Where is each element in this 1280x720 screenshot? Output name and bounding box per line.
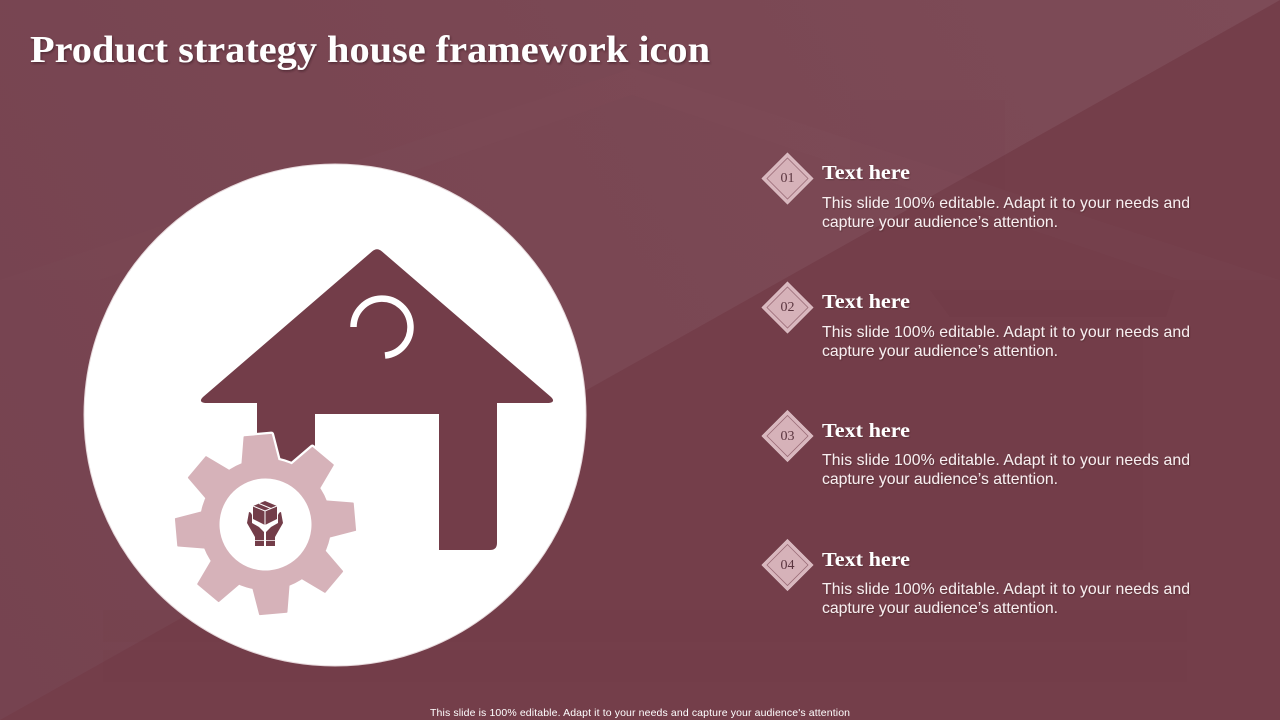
body 2: This slide 100% editable. Adapt it to your needs and [822, 324, 1190, 341]
badge 03 [762, 410, 813, 462]
badge 01 [762, 153, 813, 204]
icon: gear [169, 428, 362, 621]
item 3 [762, 410, 1190, 488]
footer note: This slide is 100% editable. Adapt it to your needs and capture your audience's attention [430, 707, 850, 719]
body 3: This slide 100% editable. Adapt it to your needs and [822, 452, 1190, 469]
icon: house [201, 249, 553, 550]
title: Product strategy house framework icon [30, 29, 710, 71]
body 4: capture your audience’s attention. [822, 600, 1058, 617]
badge 04 [762, 540, 813, 590]
icon: box held in hands [247, 501, 283, 546]
badge 04: 04 [780, 558, 794, 573]
icon: open circle arc [354, 299, 410, 356]
body 1: capture your audience’s attention. [822, 214, 1058, 231]
body 4 [822, 581, 1190, 617]
white circle panel [84, 164, 586, 666]
body 1 [822, 195, 1190, 231]
badge 01: 01 [780, 171, 794, 186]
body 3: capture your audience’s attention. [822, 471, 1058, 488]
item 1 [762, 153, 1190, 231]
body 3 [822, 452, 1190, 488]
heading 3: Text here [822, 420, 910, 442]
item 4 [762, 540, 1190, 617]
body 4: This slide 100% editable. Adapt it to your needs and [822, 581, 1190, 598]
heading 1: Text here [822, 162, 910, 184]
heading 2: Text here [822, 291, 910, 313]
body 2: capture your audience’s attention. [822, 343, 1058, 360]
heading 4: Text here [822, 549, 910, 571]
badge 02: 02 [780, 300, 794, 315]
body 1: This slide 100% editable. Adapt it to your needs and [822, 195, 1190, 212]
badge 02 [762, 282, 813, 333]
item 2 [762, 282, 1190, 360]
badge 03: 03 [780, 429, 794, 444]
body 2 [822, 324, 1190, 360]
